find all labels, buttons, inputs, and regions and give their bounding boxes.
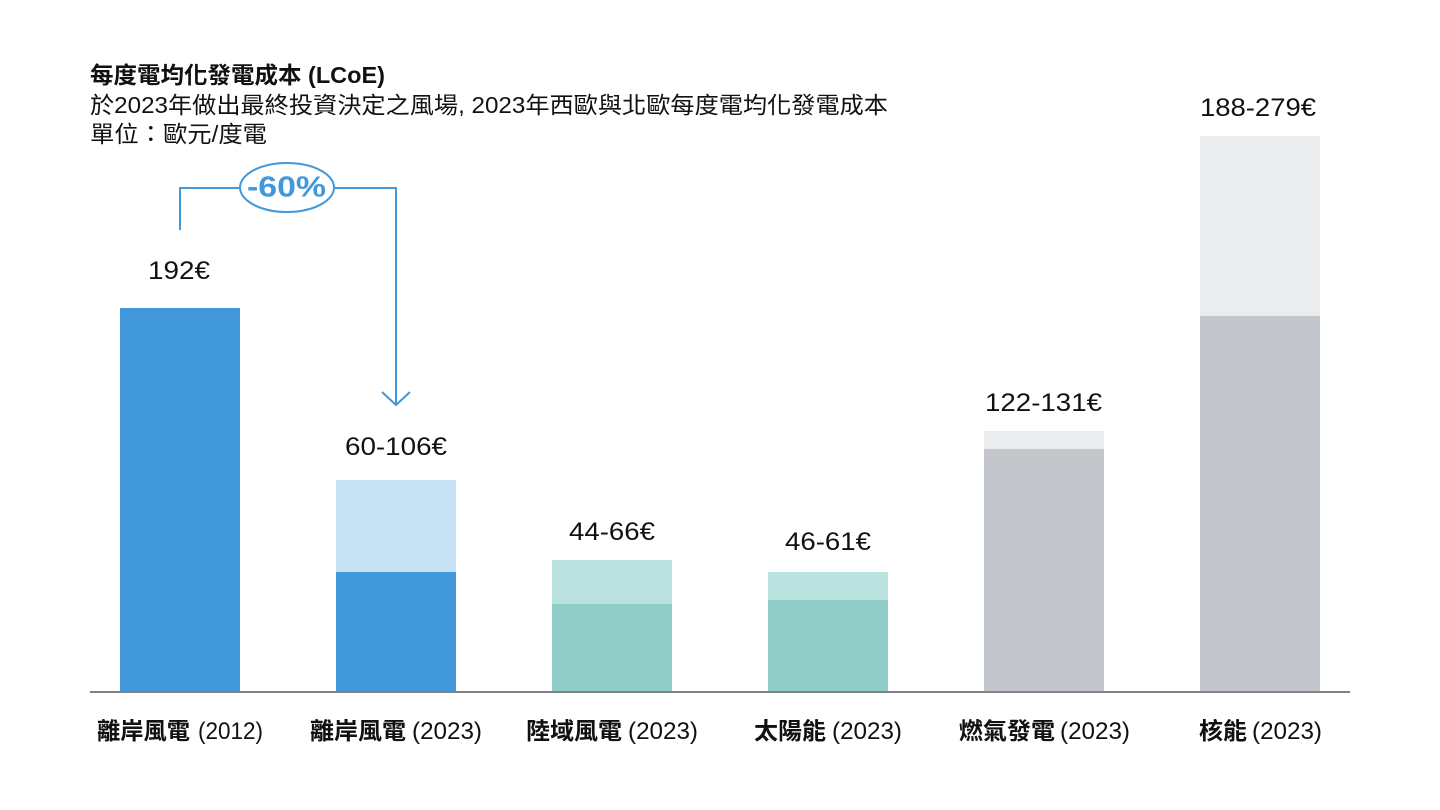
bar: onshore wind 2023 [552, 518, 672, 692]
category labels: 離岸風電 [97, 718, 190, 744]
category labels: 燃氣發電 [959, 718, 1055, 744]
bar: offshore wind 2012 [120, 257, 240, 692]
axis baseline [90, 691, 1350, 693]
callout: -60% reduction arrow [180, 163, 410, 405]
category labels: (2023) [1060, 718, 1130, 745]
value: 46-61: 46-61€ [785, 528, 871, 556]
subtitle: 於2023年做出最終投資決定之風場, 2023年西歐與北歐每度電均化發電成本 [90, 92, 888, 118]
callout: -60% reduction arrow: -60% [247, 172, 326, 204]
category labels: (2023) [832, 718, 902, 745]
category labels: (2023) [628, 718, 698, 745]
value: 60-106: 60-106€ [345, 433, 447, 461]
bar: offshore wind 2023 [336, 433, 456, 692]
bar: nuclear 2023 [1200, 94, 1320, 692]
category labels: 核能 [1199, 718, 1247, 744]
category labels: 離岸風電 [310, 718, 406, 744]
title [90, 62, 888, 147]
value: 192: 192€ [148, 257, 210, 285]
unit note: 單位：歐元/度電 [90, 121, 267, 147]
category labels: 陸域風電 [526, 718, 622, 744]
category labels [97, 718, 1322, 745]
category labels: 太陽能 [754, 718, 826, 744]
bar: gas 2023 [984, 389, 1104, 692]
value: 188-279: 188-279€ [1200, 94, 1316, 122]
bar: solar 2023 [768, 528, 888, 692]
value: 122-131: 122-131€ [985, 389, 1102, 417]
value: 44-66: 44-66€ [569, 518, 655, 546]
category labels: (2012) [198, 718, 263, 745]
category labels: (2023) [1252, 718, 1322, 745]
category labels: (2023) [412, 718, 482, 745]
title: 每度電均化發電成本 (LCoE) [90, 62, 385, 88]
